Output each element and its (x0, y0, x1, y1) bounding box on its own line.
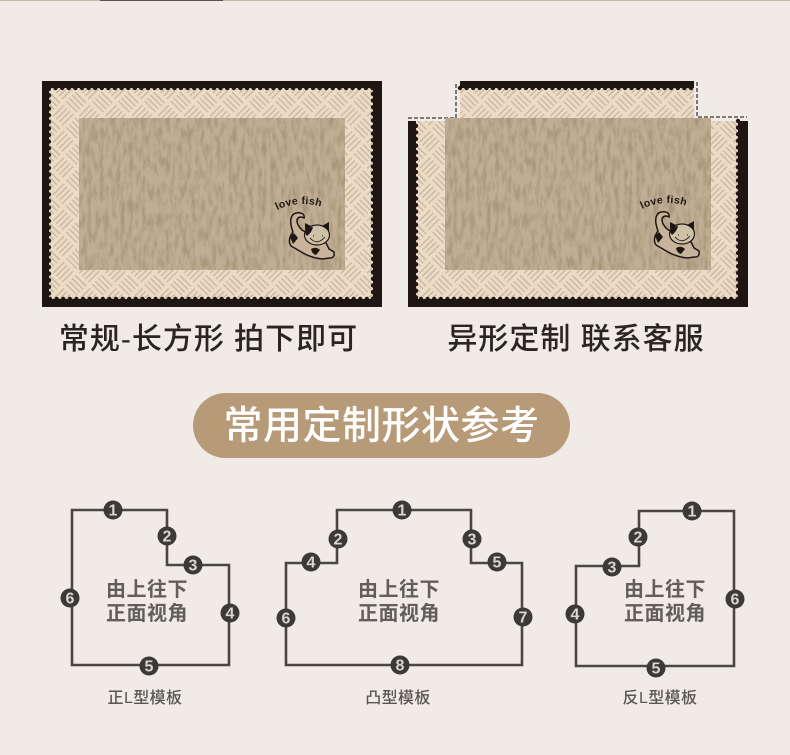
caption: standard rectangle: 常规-长方形 拍下即可 (59, 323, 358, 356)
textured centre field (445, 118, 711, 270)
marker 8: 8 (396, 658, 405, 674)
marker 2 (328, 530, 348, 548)
marker 1 (104, 500, 122, 520)
marker 2: 2 (334, 532, 343, 548)
marker 6: 6 (66, 590, 75, 608)
marker 4 (566, 604, 584, 624)
heading pill (193, 393, 570, 458)
marker 3: 3 (608, 560, 617, 576)
marker 6 (60, 588, 80, 608)
marker 3 (462, 530, 482, 548)
cat logo with love fish (274, 196, 335, 260)
marker 8 (390, 656, 410, 674)
marker 2 (628, 528, 648, 546)
marker 5 (488, 552, 506, 572)
view note (358, 578, 440, 625)
marker 1: 1 (109, 502, 118, 520)
marker 6: 6 (731, 592, 740, 608)
marker 4 (302, 552, 320, 572)
view note: 正面视角 (106, 601, 188, 625)
diagram: convex template (276, 500, 532, 707)
marker 1 (392, 500, 412, 520)
dashed cut line left (408, 82, 456, 118)
heading pill: 常用定制形状参考 (223, 405, 540, 448)
diagram: reverse L template (566, 502, 744, 707)
template name: 正L型模板 (108, 689, 182, 707)
view note: 正面视角 (624, 601, 706, 625)
template name: 反L型模板 (623, 689, 697, 707)
marker 4: 4 (571, 606, 580, 624)
panel: custom shaped rug (408, 81, 748, 307)
marker 7 (514, 608, 532, 626)
view note: 由上往下 (106, 578, 188, 601)
template name: 凸型模板 (365, 689, 431, 707)
marker 4: 4 (307, 554, 316, 572)
marker 1: 1 (398, 502, 407, 520)
marker 6: 6 (282, 610, 291, 628)
marker 5: 5 (652, 660, 661, 678)
marker 7: 7 (519, 610, 528, 626)
cat logo with love fish: love fish (274, 196, 322, 210)
marker 3: 3 (189, 558, 198, 574)
view note: 由上往下 (358, 578, 440, 601)
marker 5 (140, 656, 158, 676)
view note: 由上往下 (624, 578, 706, 601)
marker 5: 5 (493, 554, 502, 572)
marker 3: 3 (468, 532, 477, 548)
view note (106, 578, 188, 625)
marker 6 (726, 590, 744, 608)
diagram: regular L template (60, 500, 240, 707)
view note (624, 578, 706, 625)
view note: 正面视角 (358, 601, 440, 625)
marker 1 (682, 502, 702, 520)
marker 6 (276, 608, 296, 628)
marker 2: 2 (163, 528, 172, 546)
marker 5 (646, 658, 666, 678)
marker 2: 2 (634, 530, 643, 546)
marker 4 (220, 604, 240, 622)
dashed cut line right (697, 82, 747, 117)
marker 2 (158, 526, 176, 546)
marker 3 (184, 556, 202, 574)
cat logo with love fish: love fish (640, 195, 686, 209)
textured centre field (79, 118, 345, 270)
marker 5: 5 (145, 658, 154, 676)
caption: custom shape: 异形定制 联系客服 (447, 323, 705, 356)
marker 1: 1 (688, 504, 697, 520)
marker 3 (602, 558, 622, 576)
panel: standard rectangular rug (42, 81, 382, 307)
marker 4: 4 (226, 606, 235, 622)
cat logo with love fish (640, 195, 700, 259)
